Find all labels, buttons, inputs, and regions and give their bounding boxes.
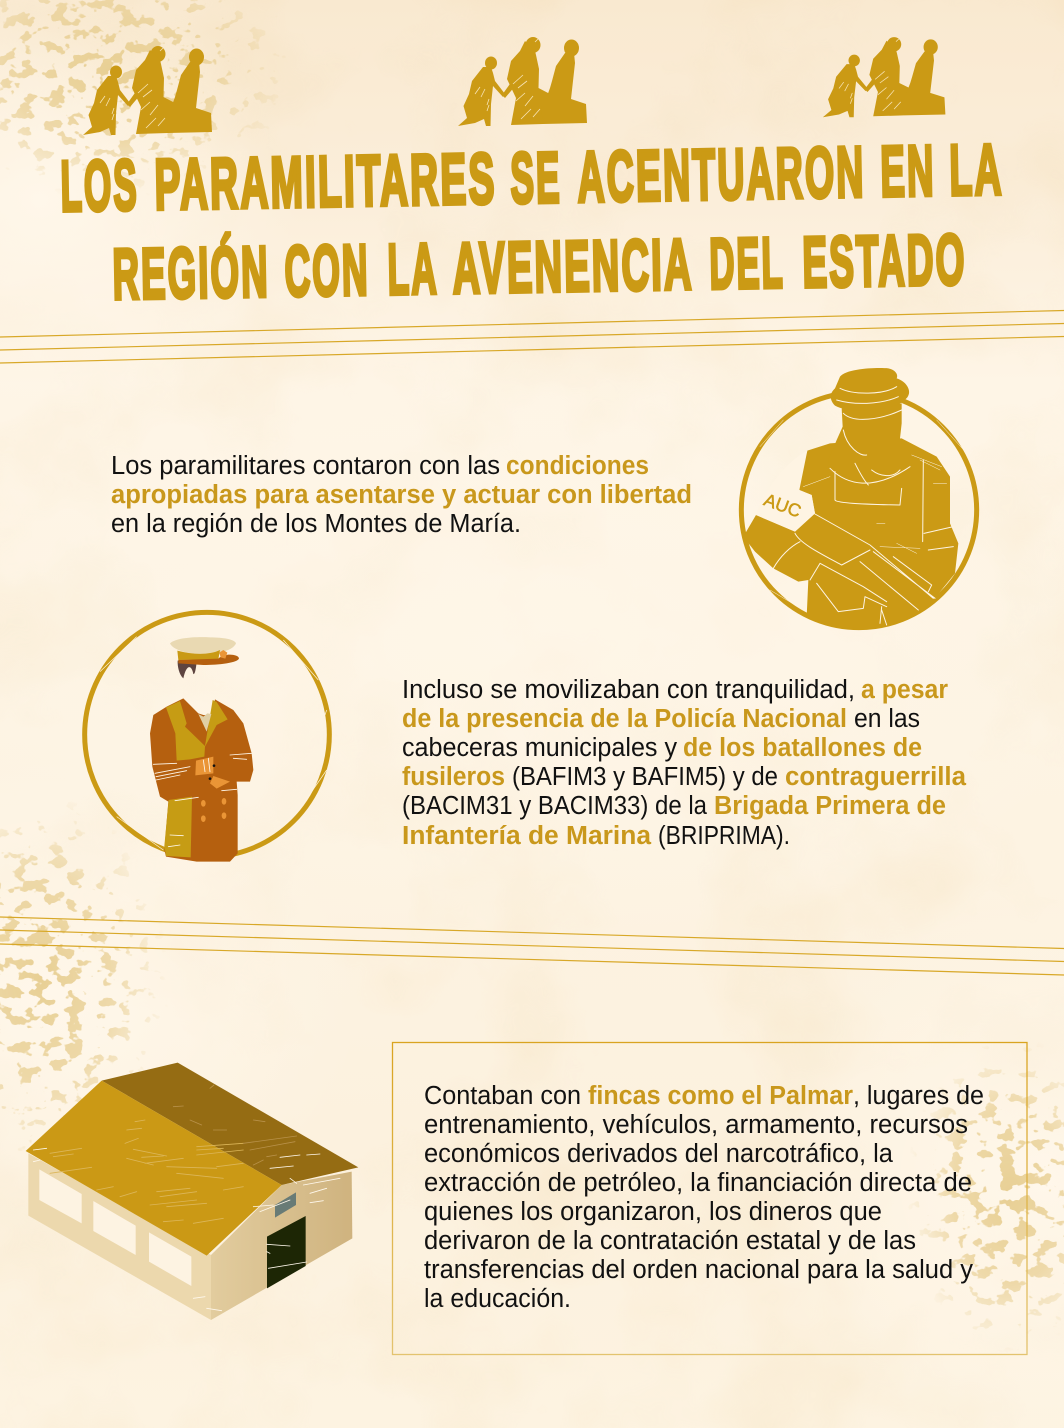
text block: Policía Nacional: Incluso se movilizaban con tranquilidad,	[402, 676, 855, 704]
text block: Policía Nacional: de la presencia de la Policía Nacional	[402, 705, 847, 733]
text block: condiciones apropiadas: en la región de los Montes de María.	[111, 510, 521, 538]
text block: fincas como el Palmar	[424, 1082, 984, 1313]
long wall with windows	[28, 1153, 211, 1320]
text block: Policía Nacional	[402, 676, 967, 850]
text block: fincas como el Palmar: económicos derivados del narcotráfico, la	[424, 1140, 894, 1168]
text block: condiciones apropiadas: Los paramilitares contaron con las	[111, 452, 500, 480]
roof	[26, 1063, 358, 1256]
icon: family 3	[823, 37, 945, 117]
text block: fincas como el Palmar: , lugares de	[853, 1082, 984, 1110]
text block: Policía Nacional: (BACIM31 y BACIM33) de la	[402, 792, 708, 820]
title: LA	[949, 130, 1004, 211]
title: CON	[284, 231, 370, 312]
text block: Policía Nacional: fusileros	[402, 763, 505, 791]
icons: kneeling family row	[83, 37, 945, 135]
title: REGIÓN	[112, 231, 270, 315]
title: DEL	[709, 223, 785, 305]
white scratches	[33, 1148, 340, 1311]
text block: Policía Nacional: Brigada Primera de	[714, 792, 946, 820]
text block: condiciones apropiadas	[111, 452, 692, 538]
text block: fincas como el Palmar: fincas como el Palmar	[588, 1082, 853, 1110]
divider lines top	[0, 310, 1064, 363]
icon: military officer in circle	[85, 612, 329, 862]
text block: fincas como el Palmar: transferencias del orden nacional para la salud y	[424, 1256, 973, 1284]
text block: Policía Nacional: contraguerrilla	[785, 763, 967, 791]
text block: Policía Nacional: cabeceras municipales y	[402, 734, 677, 762]
title: LA	[387, 229, 439, 310]
text block: fincas como el Palmar: extracción de petróleo, la financiación directa de	[424, 1169, 972, 1197]
title: EN	[880, 131, 936, 212]
text block: fincas como el Palmar: la educación.	[424, 1285, 571, 1313]
text block: condiciones apropiadas: apropiadas para asentarse y actuar con libertad	[111, 481, 692, 509]
icon: AUC paramilitary in circle	[741, 368, 977, 633]
armband AUC: AUC	[761, 490, 804, 521]
title: PARAMILITARES	[154, 139, 497, 225]
text block: Policía Nacional: de los batallones de	[683, 734, 922, 762]
divider lines middle	[0, 917, 1064, 975]
gable wall with door	[211, 1172, 352, 1320]
text block: Policía Nacional: a pesar	[861, 676, 948, 704]
text block: Policía Nacional: (BAFIM3 y BAFIM5) y de	[512, 763, 778, 791]
icon: farm building	[26, 1063, 358, 1320]
text block: Policía Nacional: en las	[854, 705, 920, 733]
icon: family 2	[458, 37, 587, 126]
title: SE	[510, 138, 562, 219]
text block: Policía Nacional: (BRIPRIMA).	[658, 822, 790, 850]
officer coat	[150, 698, 253, 862]
text block: condiciones apropiadas: condiciones	[506, 452, 649, 480]
armband AUC	[756, 451, 815, 532]
text block: fincas como el Palmar: entrenamiento, vehículos, armamento, recursos	[424, 1111, 968, 1139]
icon: family 1	[83, 46, 212, 135]
callout frame: fincas	[392, 1042, 1027, 1354]
text block: fincas como el Palmar: Contaban con	[424, 1082, 581, 1110]
officer cap	[170, 637, 239, 678]
title: AVENENCIA	[452, 225, 694, 309]
text block: fincas como el Palmar: derivaron de la contratación estatal y de las	[424, 1227, 916, 1255]
title	[60, 130, 1004, 315]
text block: Policía Nacional: Infantería de Marina	[402, 822, 652, 850]
text block: fincas como el Palmar: quienes los organizaron, los dineros que	[424, 1198, 882, 1226]
title: LOS	[60, 146, 139, 227]
